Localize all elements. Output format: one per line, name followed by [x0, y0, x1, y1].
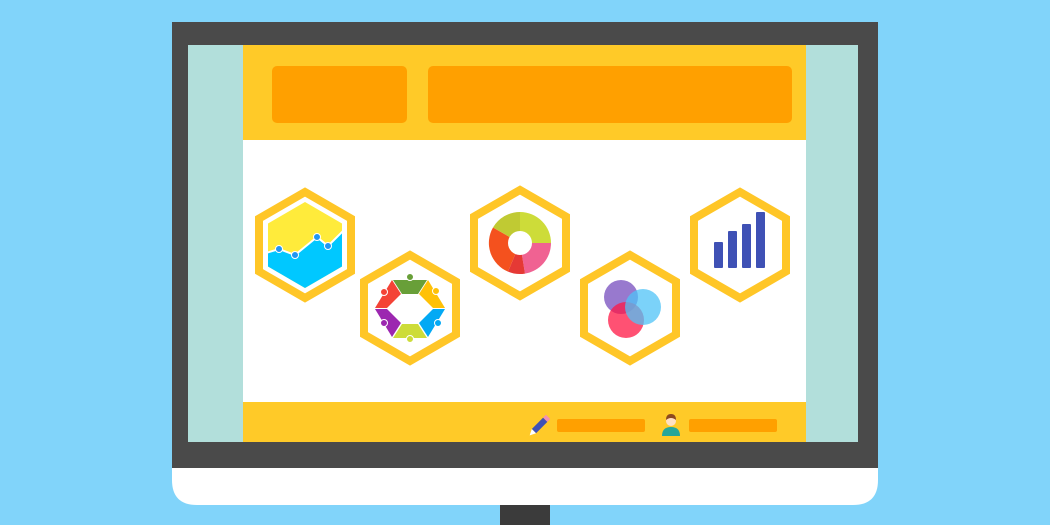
header bar [243, 45, 806, 140]
monitor [172, 22, 878, 505]
hexagon: puzzle ring [364, 255, 456, 361]
icon: person [662, 414, 680, 436]
content area [243, 140, 806, 402]
hexagon: venn diagram [584, 255, 676, 361]
footer bar [243, 402, 806, 442]
hexagon: bar chart [694, 192, 786, 298]
hexagon: area chart [259, 192, 351, 298]
hexagon: donut chart [474, 190, 566, 296]
monitor frame [172, 22, 878, 468]
monitor stand [500, 500, 550, 525]
screen side panels [188, 45, 858, 442]
monitor chin [172, 460, 878, 505]
icon: pencil [528, 415, 550, 437]
